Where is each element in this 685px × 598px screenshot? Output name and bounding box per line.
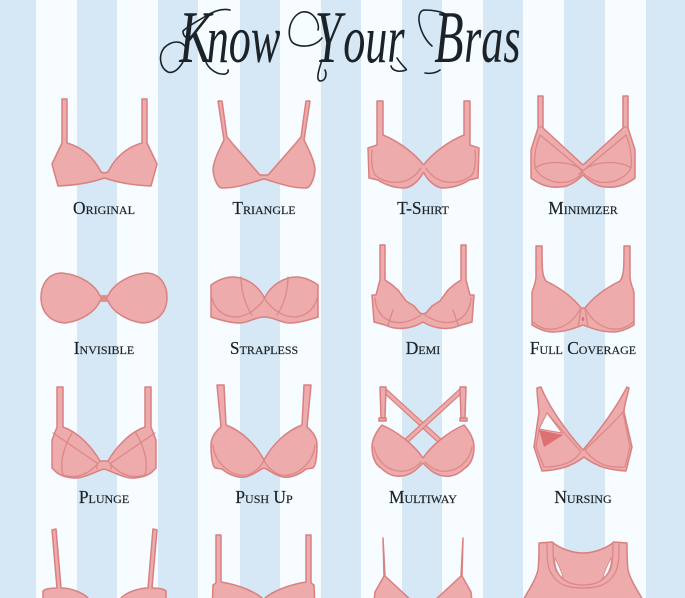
bra: demi <box>372 245 474 328</box>
bra: strapless <box>211 277 318 323</box>
bra: nursing <box>534 387 632 471</box>
bra: row 4 second <box>212 535 315 598</box>
white fold <box>539 413 562 433</box>
bra: original <box>52 99 157 186</box>
label: minimizer: Minimizer <box>548 198 618 218</box>
bra: plunge <box>52 387 156 478</box>
label: invisible: Invisible <box>74 338 134 358</box>
dark cup flap <box>539 430 563 447</box>
bra: full coverage <box>532 246 634 332</box>
title: now <box>207 3 280 77</box>
label: triangle: Triangle <box>232 198 296 218</box>
bra: multiway <box>372 387 474 476</box>
bra: row 4 first <box>43 529 166 598</box>
bra: push up <box>211 385 317 477</box>
label: strapless: Strapless <box>230 338 298 358</box>
bra: row 4 third <box>373 538 473 598</box>
title: our <box>343 3 405 77</box>
bra: t-shirt <box>368 101 479 188</box>
label: push up: Push Up <box>235 487 293 507</box>
bra: row 4 racerback <box>520 542 646 598</box>
label: multiway: Multiway <box>389 487 457 507</box>
title: ras <box>464 3 521 77</box>
bra: triangle <box>213 101 315 188</box>
label: original: Original <box>73 198 135 218</box>
label: t-shirt: T-Shirt <box>397 198 450 218</box>
label: plunge: Plunge <box>79 487 129 507</box>
bra: invisible <box>41 273 167 323</box>
label: full coverage: Full Coverage <box>530 338 636 358</box>
label: nursing: Nursing <box>554 487 612 507</box>
label: demi: Demi <box>406 338 440 358</box>
title <box>161 0 521 81</box>
bra: minimizer <box>531 96 635 187</box>
